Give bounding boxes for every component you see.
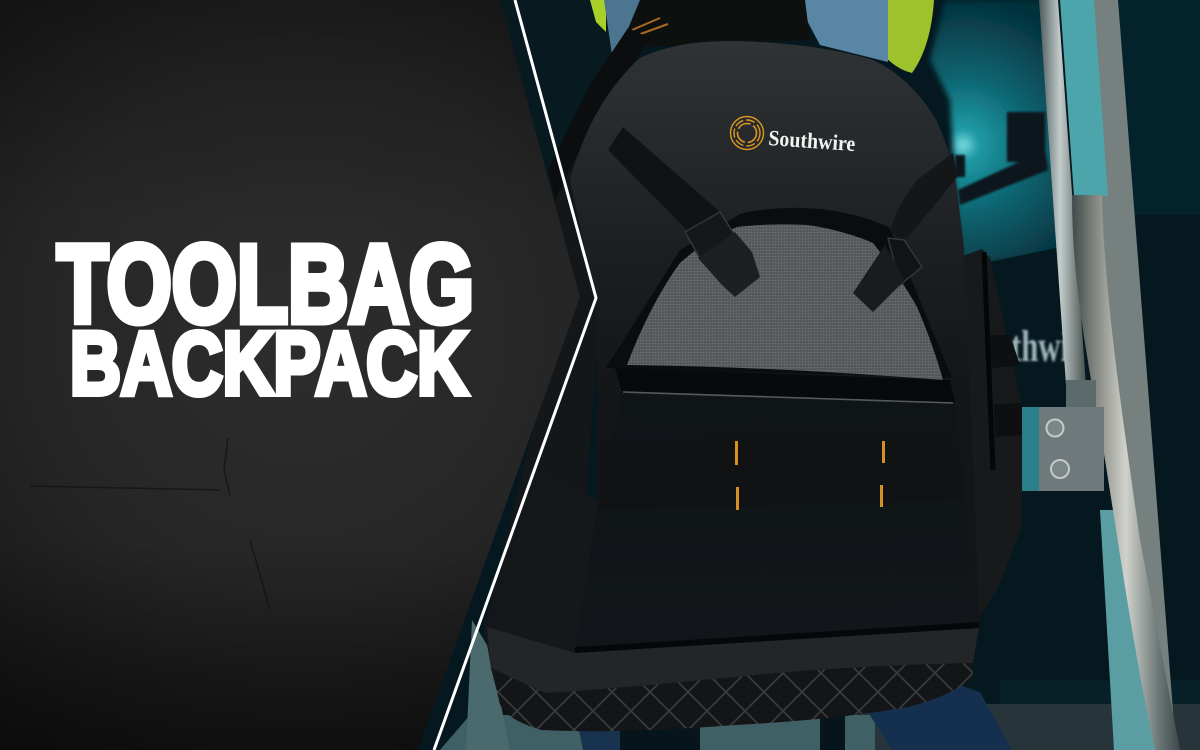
dark sign board xyxy=(962,245,1075,410)
hi-vis vest left xyxy=(590,0,606,32)
left strap xyxy=(608,127,720,230)
lower teal panel xyxy=(1100,510,1160,750)
webbing strip xyxy=(598,435,964,510)
side pocket xyxy=(957,249,1022,620)
title line 1: TOOLBAG xyxy=(57,223,474,346)
lower left side fabric xyxy=(487,470,598,653)
title line 2: BACKPACK xyxy=(70,313,468,413)
right buckle frame xyxy=(888,238,922,285)
right buckle xyxy=(853,238,922,312)
teal glow behind the bag xyxy=(930,0,1062,262)
worker: jeans, gloves and hi-vis vest xyxy=(440,0,1012,750)
jeans left at top xyxy=(604,0,650,55)
gloves xyxy=(620,0,810,48)
logo mark xyxy=(730,116,764,150)
zipper highlight xyxy=(623,392,953,403)
support post xyxy=(466,620,510,750)
logo wordmark: Southwire xyxy=(768,125,856,156)
orange stitches xyxy=(735,441,885,510)
jeans leg left xyxy=(578,722,700,750)
white chevron line xyxy=(434,0,596,750)
wall sign lettering: thwi xyxy=(1011,322,1069,371)
junction box xyxy=(1022,380,1104,491)
rubber belt xyxy=(487,627,979,693)
side pocket strap lower xyxy=(994,403,1022,437)
right buckle clip xyxy=(853,245,905,312)
dark post under bag right xyxy=(820,710,845,750)
upper teal panel xyxy=(1060,0,1108,196)
lower front pocket xyxy=(575,395,979,653)
rear conduit xyxy=(1039,0,1086,385)
mesh panel side binding xyxy=(606,208,952,378)
backpack xyxy=(484,28,1022,731)
dark post under bag xyxy=(620,722,700,750)
steel strut xyxy=(1092,0,1176,750)
left buckle clip xyxy=(698,232,760,297)
grey mesh panel xyxy=(627,224,943,380)
rubber tread xyxy=(491,663,973,731)
dark title panel xyxy=(0,0,580,750)
left buckle xyxy=(685,212,760,297)
rear side shell xyxy=(484,50,638,667)
zipper band xyxy=(615,368,955,402)
front shell xyxy=(570,41,980,655)
left buckle frame xyxy=(685,212,738,262)
left shoulder strap behind bag xyxy=(548,28,650,200)
side pocket zipper xyxy=(984,252,993,470)
pocket bottom seam xyxy=(575,625,979,650)
title xyxy=(57,223,474,413)
glove stitching xyxy=(632,18,668,36)
Southwire logo xyxy=(730,116,856,156)
metal conduit and strut xyxy=(1039,0,1180,750)
black bracket and beam xyxy=(955,112,1048,205)
jeans leg right xyxy=(868,680,1012,750)
side pocket strap upper xyxy=(989,335,1020,368)
hi-vis vest right xyxy=(880,0,934,73)
right strap xyxy=(890,153,957,243)
front conduit xyxy=(1072,195,1180,750)
jeans right at top xyxy=(796,0,888,62)
floor between legs xyxy=(440,715,875,750)
